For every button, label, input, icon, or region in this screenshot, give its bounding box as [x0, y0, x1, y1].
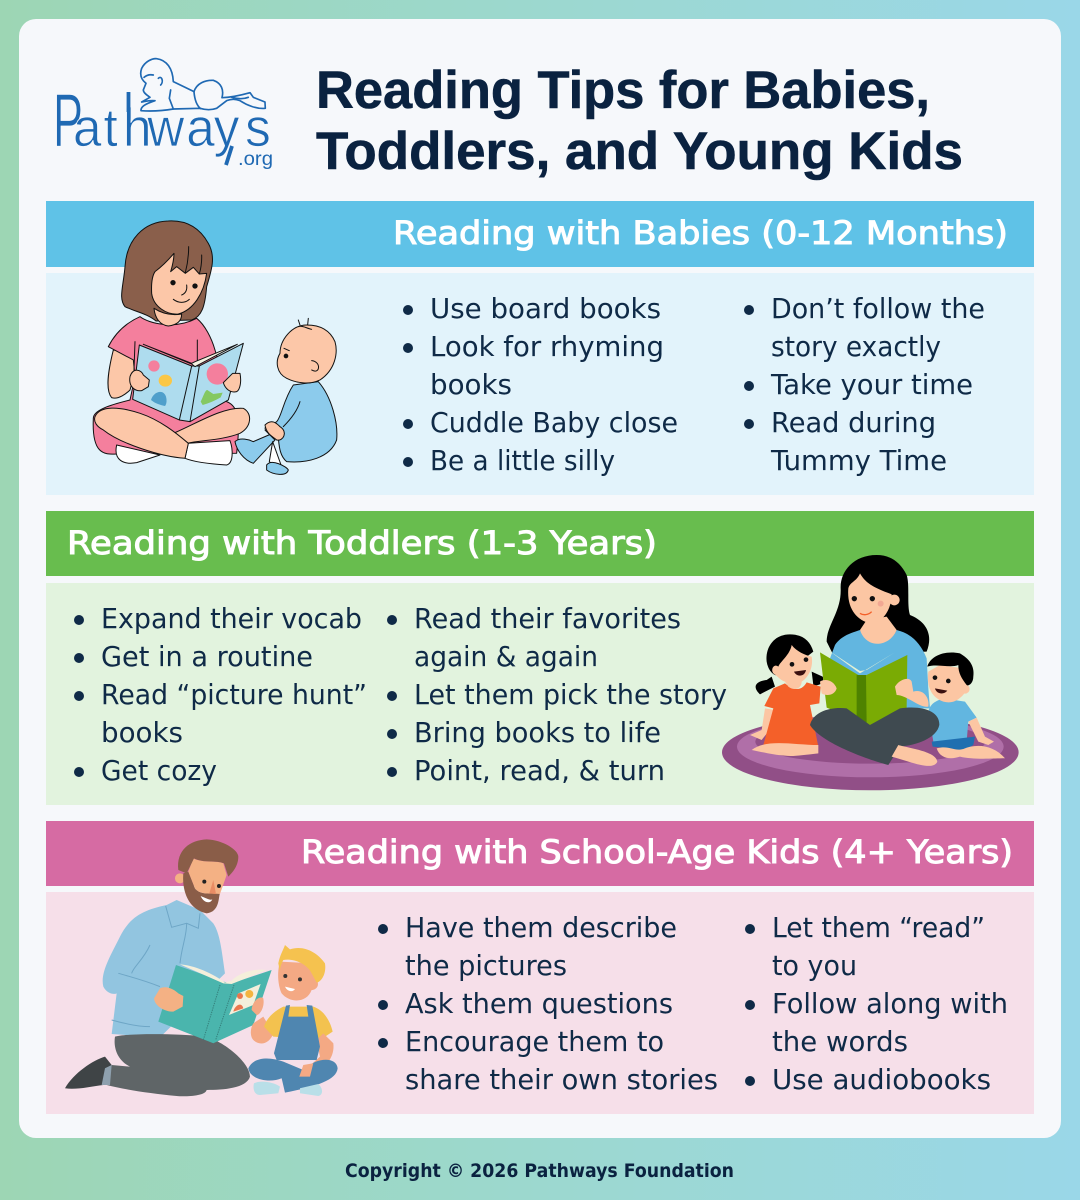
list: babies column 1: Look for rhyming [430, 330, 664, 363]
title [316, 61, 963, 181]
list: toddlers column 1: Expand their vocab [101, 602, 362, 635]
list: babies column 1 [403, 292, 678, 477]
boy child [927, 652, 1005, 759]
list: toddlers column 1: books [101, 716, 183, 749]
panel background: school-age [46, 892, 1034, 1114]
panel: school-age kids [46, 821, 1034, 1114]
list: babies column 1: Cuddle Baby close [430, 406, 678, 439]
list: toddlers column 2 [387, 602, 727, 787]
list: toddlers column 2: Point, read, & turn [414, 754, 665, 787]
list: school-age column 1: Ask them questions [405, 987, 673, 1020]
list: toddlers column 2: Bring books to life [414, 716, 661, 749]
list: school-age column 1: Encourage them to [405, 1025, 664, 1058]
list: toddlers column 1: Get in a routine [101, 640, 313, 673]
panel background: toddlers [46, 583, 1034, 805]
list: school-age column 2: Let them “read” [772, 911, 985, 944]
heading bar: toddlers: Reading with Toddlers (1-3 Years) [67, 524, 657, 562]
logo .org: .org [238, 149, 273, 170]
list: babies column 1: books [430, 368, 512, 401]
list: babies column 1: Be a little silly [430, 444, 615, 477]
heading bar: toddlers [46, 511, 1034, 576]
logo: Pathways.org [53, 59, 273, 170]
list: babies column 2: Take your time [770, 368, 973, 401]
list: school-age column 2 [745, 911, 1008, 1096]
panel: babies [46, 201, 1034, 495]
boy child [248, 945, 338, 1096]
list: school-age column 2: Use audiobooks [772, 1063, 991, 1096]
logo wordmark [53, 79, 271, 165]
panel background: babies [46, 273, 1034, 495]
logo wordmark: athways [73, 98, 271, 158]
list: school-age column 1: share their own stories [405, 1063, 718, 1096]
list: school-age column 2: to you [772, 949, 857, 982]
heading bar: school-age: Reading with School-Age Kids (4+ Years) [301, 833, 1013, 871]
list: school-age column 1: the pictures [405, 949, 567, 982]
heading bar: babies [46, 201, 1034, 267]
illustration: girl reading to baby [93, 221, 337, 474]
list: babies column 2: Don’t follow the [771, 292, 985, 325]
logo wordmark: P [53, 79, 83, 163]
list: toddlers column 2: Read their favorites [414, 602, 681, 635]
list: toddlers column 1 [74, 602, 367, 787]
title: Reading Tips for Babies, [316, 61, 930, 120]
list: school-age column 2: Follow along with [772, 987, 1008, 1020]
list: school-age column 2: the words [772, 1025, 908, 1058]
list: school-age column 1: Have them describe [405, 911, 677, 944]
list: toddlers column 1: Read “picture hunt” [101, 678, 367, 711]
list: toddlers column 2: again & again [414, 640, 598, 673]
girl child [750, 634, 823, 756]
title: Toddlers, and Young Kids [316, 122, 963, 181]
list: toddlers column 1: Get cozy [101, 754, 217, 787]
list: babies column 2: Tummy Time [770, 444, 947, 477]
illustration: mother reading to two children [722, 555, 1019, 790]
illustration: father reading to child [65, 839, 338, 1096]
heading bar: school-age [46, 821, 1034, 886]
panel: toddlers [46, 511, 1034, 805]
list: babies column 2 [744, 292, 985, 477]
list: toddlers column 2: Let them pick the story [414, 678, 727, 711]
list: babies column 2: Read during [771, 406, 936, 439]
list: babies column 2: story exactly [771, 330, 941, 363]
footer copyright: Copyright © 2026 Pathways Foundation [345, 1160, 734, 1182]
list: school-age column 1 [378, 911, 718, 1096]
icon: crawling baby [141, 59, 265, 111]
list: babies column 1: Use board books [430, 292, 661, 325]
heading bar: babies: Reading with Babies (0-12 Months) [393, 214, 1008, 252]
